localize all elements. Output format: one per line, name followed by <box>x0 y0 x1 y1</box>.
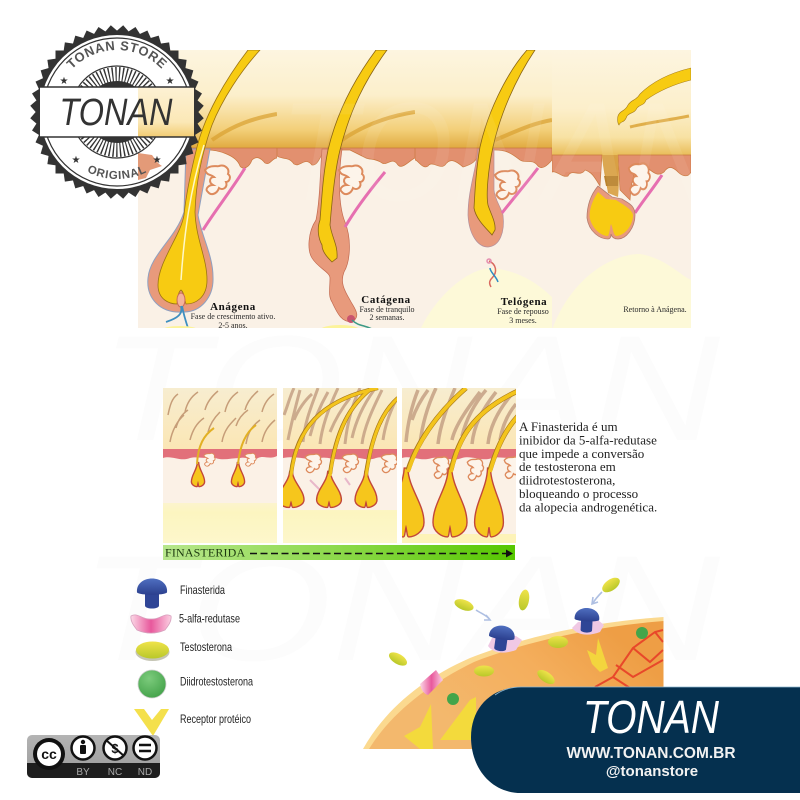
sebaceous gland, panel 4 <box>629 163 650 195</box>
floating testosterone molecules <box>387 575 622 668</box>
watermark: lower rows: TONAN <box>80 524 721 692</box>
brand pill: @tonanstore <box>606 763 698 780</box>
description text: inibidor da 5-alfa-redutase <box>519 432 657 448</box>
description text: que impede a conversão <box>519 446 644 461</box>
legend: Testosterona: Testosterona <box>180 640 232 654</box>
watermark: top row over illustration: TONAN <box>280 73 721 230</box>
stamp: Tonan Store Original: ★ <box>60 76 69 87</box>
legend: Finasterida <box>137 578 225 608</box>
panel: finasterida stage 3 <box>402 388 516 543</box>
CC license badge: NC <box>108 767 122 778</box>
description text: da alopecia androgenética. <box>519 500 657 514</box>
watermark: lower rows: TONAN <box>100 304 721 472</box>
label: Catágena: 2 semanas. <box>369 313 405 322</box>
finasterida molecules on membrane <box>487 607 600 653</box>
panel: Anágena <box>138 50 277 334</box>
legend: 5-alfa-redutase: 5-alfa-redutase <box>179 612 240 626</box>
CC license badge <box>27 735 160 778</box>
stamp: Tonan Store Original <box>30 25 204 199</box>
label: Telógena: Telógena <box>501 296 547 308</box>
label: Catágena: Catágena <box>361 294 411 306</box>
legend: Diidrotestosterona <box>138 670 253 698</box>
stamp: Tonan Store Original: ★ <box>166 76 175 87</box>
label: Anágena: 2-5 anos. <box>218 321 248 330</box>
panel: finasterida stage 1 <box>163 388 277 543</box>
arrows to receptors <box>476 592 602 620</box>
CC license badge: BY <box>76 767 90 778</box>
brand pill: WWW.TONAN.COM.BR <box>566 745 736 762</box>
label: Catágena <box>359 294 415 322</box>
stamp: Tonan Store Original: ★ <box>153 155 162 166</box>
panel: Retorno à Anágena <box>552 50 691 330</box>
description text: bloqueando o processo <box>519 486 638 501</box>
label: Telógena: 3 meses. <box>509 316 537 325</box>
label: Catágena: Fase de tranquilo <box>359 305 415 314</box>
CC license badge: $ <box>111 741 119 756</box>
description text: diidrotestosterona, <box>519 472 615 488</box>
label: Retorno à Anágena: Retorno à Anágena. <box>623 305 687 314</box>
green bar with arrow <box>163 545 515 560</box>
legend <box>131 578 253 736</box>
brand pill <box>471 687 800 793</box>
legend: Receptor protéico <box>134 709 251 736</box>
label: Anágena: Anágena <box>210 301 256 313</box>
label: Telógena: Fase de repouso <box>497 307 549 316</box>
CC license badge: cc <box>41 746 57 762</box>
stamp: Tonan Store Original: ★ <box>72 155 81 166</box>
description text: de testosterona em <box>519 459 616 474</box>
description text: A Finasterida é um <box>519 419 618 434</box>
stamp: Tonan Store Original: TONAN STORE <box>66 41 168 69</box>
stamp: serrated edge <box>30 25 204 199</box>
legend: Diidrotestosterona: Diidrotestosterona <box>180 674 253 688</box>
legend: Finasterida: Finasterida <box>180 583 225 597</box>
description text <box>519 419 657 514</box>
stamp: Tonan Store Original: ORIGINAL <box>88 166 146 179</box>
brand pill: TONAN <box>583 691 720 743</box>
green bar with arrow: FINASTERIDA <box>165 546 246 560</box>
legend: 5-alfa-redutase <box>131 612 240 633</box>
watermark: lower rows <box>80 304 721 692</box>
label: Anágena <box>191 301 275 330</box>
nucleus grid <box>595 630 663 692</box>
panel: Telógena <box>415 50 555 330</box>
panel: Catágena <box>277 50 415 335</box>
hormones inside cell <box>548 636 568 648</box>
label: Telógena <box>497 296 549 325</box>
receptors inside cell <box>587 638 608 672</box>
panel: finasterida stage 2 <box>278 388 398 543</box>
label: Anágena: Fase de crescimento ativo. <box>191 312 275 321</box>
cell diagram <box>363 617 664 749</box>
legend: Receptor protéico: Receptor protéico <box>180 712 251 726</box>
legend: Testosterona <box>136 640 232 661</box>
CC license badge: ND <box>138 767 152 778</box>
membrane enzymes <box>420 670 443 695</box>
stamp: Tonan Store Original: TONAN <box>60 92 173 134</box>
